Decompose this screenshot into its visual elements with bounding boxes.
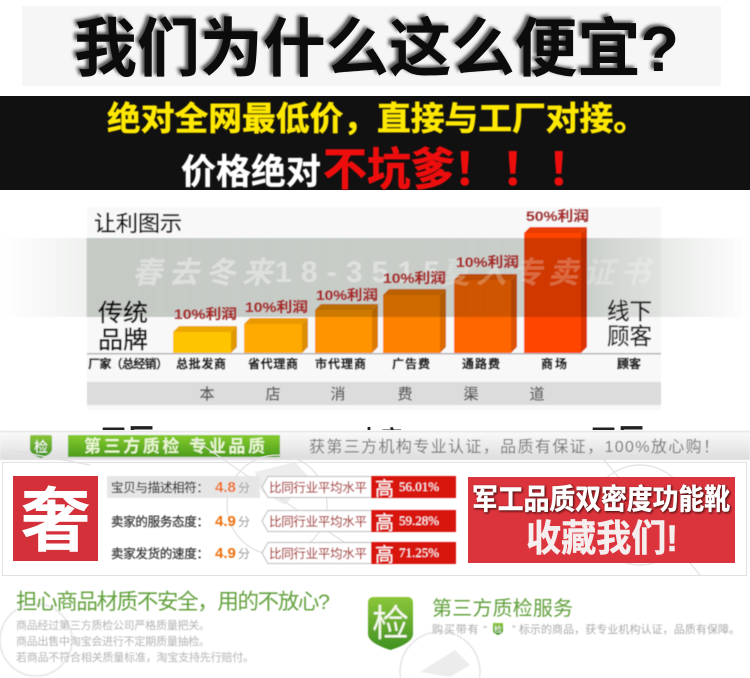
worry heading: 担心商品材质不安全，用的不放心? bbox=[16, 590, 330, 614]
profit labels bbox=[174, 208, 589, 322]
channel labels: 商场 bbox=[541, 356, 567, 371]
panel: quality header bbox=[0, 431, 750, 460]
slogan line 2 red: 不坑爹 bbox=[323, 144, 455, 195]
rating row 1: 56.01% bbox=[399, 479, 439, 494]
channel labels: 厂家（总经销） bbox=[88, 356, 168, 371]
translucent watermark band bbox=[0, 238, 750, 317]
green banner: 第三方质检 专业品质 bbox=[84, 436, 265, 456]
red promo banner bbox=[468, 477, 735, 563]
rating row 1 bbox=[107, 476, 456, 500]
bar 6 bbox=[524, 227, 587, 353]
channel strip: 渠 bbox=[463, 386, 479, 403]
slogan line 2 red bbox=[323, 144, 593, 195]
rating row 2: 4.9 bbox=[215, 513, 236, 530]
watermark stamps bbox=[10, 440, 700, 575]
icon: large shield: 检 bbox=[372, 603, 409, 644]
watermark text: 18-3515 bbox=[275, 256, 440, 289]
footer watermarks bbox=[0, 604, 480, 678]
watermark text: 夏入专卖证书 bbox=[440, 257, 655, 290]
watermark text: 春去冬来 bbox=[132, 257, 275, 290]
worry copy: 商品经过第三方质检公司严格质量把关。 bbox=[16, 618, 210, 632]
channel strip: 费 bbox=[397, 386, 413, 403]
profit labels: 10%利润 bbox=[245, 299, 308, 315]
slogan line 2 red: ！ bbox=[501, 144, 547, 195]
watermark text bbox=[132, 256, 655, 290]
clipped text fragments bbox=[102, 426, 642, 430]
title shadow: 我们为什么这么便宜? bbox=[71, 11, 676, 83]
slogan line 2 white: 价格绝对 bbox=[181, 153, 321, 192]
slogan line 1: 绝对全网最低价，直接与工厂对接。 bbox=[107, 100, 647, 137]
worry copy: 若商品不符合相关质量标准，淘宝支持先行赔付。 bbox=[16, 650, 254, 664]
clipped text fragments: 本店 bbox=[358, 426, 402, 451]
bar 2 bbox=[244, 318, 308, 353]
panel: footer notes bbox=[0, 590, 740, 678]
rating row 3: 分 bbox=[238, 547, 250, 561]
rating row 3: 比同行业平均水平 bbox=[269, 547, 367, 561]
channel labels: 广告费 bbox=[392, 356, 430, 371]
service heading: 第三方质检服务 bbox=[432, 597, 573, 620]
rating row 2 bbox=[111, 510, 456, 534]
panel: profit chart bbox=[0, 207, 750, 410]
channel strip: 消 bbox=[330, 386, 346, 403]
title: 我们为什么这么便宜? bbox=[74, 13, 679, 85]
chart heading: 让利图示 bbox=[94, 212, 182, 236]
bar 1 bbox=[173, 326, 237, 353]
header promise: 获第三方机构专业认证，品质有保证，100%放心购！ bbox=[309, 438, 719, 456]
panel: ratings bbox=[2, 440, 746, 576]
channel strip: 本 bbox=[199, 386, 215, 403]
profit labels: 10%利润 bbox=[456, 254, 519, 270]
right label: offline customers: 顾客 bbox=[607, 323, 652, 349]
clipped text fragments: 工厂 bbox=[590, 424, 644, 454]
profit labels: 10%利润 bbox=[316, 287, 378, 303]
channel labels: 总批发商 bbox=[176, 356, 226, 371]
channel labels: 通路费 bbox=[462, 356, 500, 371]
channel strip: 道 bbox=[529, 386, 545, 403]
icon: inline shield: 检 bbox=[494, 624, 502, 634]
promo line 1: 军工品质双密度功能靴 bbox=[472, 484, 730, 516]
rating row 3: 卖家发货的速度： bbox=[111, 546, 209, 561]
stamp centre bbox=[255, 462, 310, 505]
promo line 2: 收藏我们! bbox=[526, 518, 678, 559]
channel strip: 店 bbox=[265, 386, 281, 403]
rating row 3 bbox=[111, 542, 456, 566]
rating row 1: 比同行业平均水平 bbox=[269, 481, 367, 495]
service copy: 购买带有 “ bbox=[432, 622, 487, 636]
profit labels: 50%利润 bbox=[526, 208, 589, 224]
channel labels: 顾客 bbox=[617, 356, 641, 371]
service copy bbox=[432, 622, 740, 636]
worry copy bbox=[16, 618, 254, 664]
service copy: ” 标示的商品，获专业机构认证，品质有保障。 bbox=[512, 622, 740, 636]
rating row 2: 比同行业平均水平 bbox=[269, 515, 367, 529]
bar 4 bbox=[383, 289, 446, 353]
slogan line 2 red: ！ bbox=[453, 144, 499, 195]
right label: offline customers bbox=[607, 298, 652, 349]
rating row 2: 卖家的服务态度： bbox=[111, 514, 209, 529]
rating row 1: 高 bbox=[375, 478, 394, 500]
right label: offline customers: 线下 bbox=[607, 298, 652, 324]
rating row 3: 高 bbox=[375, 544, 394, 566]
rating row 2: 59.28% bbox=[399, 513, 439, 528]
channel labels: 市代理商 bbox=[315, 356, 366, 371]
left label: traditional brand: 传统 bbox=[98, 300, 148, 327]
icon: small shield: 检 bbox=[34, 439, 48, 455]
rating row 1: 分 bbox=[238, 481, 250, 495]
rating row 1: 4.8 bbox=[215, 479, 236, 496]
profit labels: 10%利润 bbox=[383, 270, 446, 286]
slogan band bbox=[0, 96, 750, 195]
rating row 3: 4.9 bbox=[215, 545, 236, 562]
channel labels: 省代理商 bbox=[248, 356, 298, 371]
bar 5 bbox=[454, 274, 517, 353]
rating row 1: 宝贝与描述相符： bbox=[111, 480, 209, 495]
profit labels: 10%利润 bbox=[174, 306, 237, 322]
channel strip bbox=[87, 382, 661, 405]
icon: small shield bbox=[30, 435, 52, 458]
left label: traditional brand bbox=[98, 300, 148, 354]
icon: large shield bbox=[368, 597, 413, 650]
icon: red luxury tile: 奢 bbox=[20, 482, 90, 560]
clipped text fragments: 工厂 bbox=[100, 424, 154, 454]
title panel bbox=[22, 6, 721, 86]
promo shadow: 军工品质双密度功能靴 bbox=[473, 485, 731, 517]
left label: traditional brand: 品牌 bbox=[98, 327, 148, 354]
channel labels bbox=[88, 356, 641, 371]
slogan line 2 red: ！ bbox=[547, 144, 593, 195]
bar 3 bbox=[315, 304, 378, 353]
rating row 2: 高 bbox=[375, 512, 394, 534]
rating row 3: 71.25% bbox=[399, 545, 439, 560]
worry copy: 商品出售中淘宝会进行不定期质量抽检。 bbox=[16, 634, 210, 648]
icon: inline shield bbox=[493, 623, 503, 635]
rating row 2: 分 bbox=[238, 515, 250, 529]
